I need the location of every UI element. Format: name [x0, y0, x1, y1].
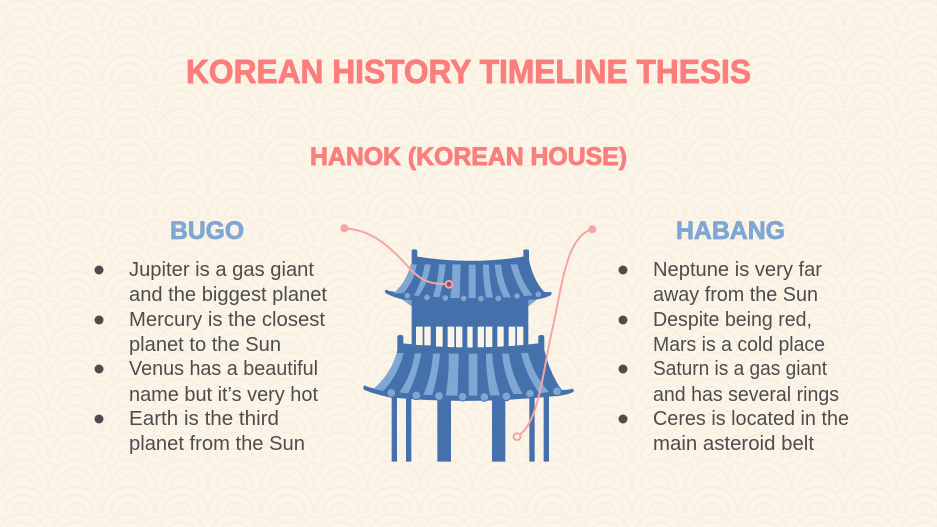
Bugo list: and the biggest planet: [129, 284, 327, 306]
Habang list: [618, 259, 849, 455]
Habang heading: HABANG: [676, 217, 785, 245]
title: KOREAN HISTORY TIMELINE THESIS: [186, 53, 751, 90]
Habang list: Neptune is very far: [653, 259, 822, 281]
lower rafters: [373, 353, 549, 396]
Habang list: main asteroid belt: [653, 433, 814, 455]
panel: Habang: [618, 217, 849, 455]
lower roof beads: [387, 387, 561, 401]
Bugo list: name but it’s very hot: [129, 384, 318, 406]
columns: [392, 395, 549, 462]
icon: hanok pagoda: [363, 249, 574, 462]
callout line: right: [514, 225, 596, 440]
Habang list: Saturn is a gas giant: [653, 358, 827, 380]
upper roof beads: [404, 291, 542, 302]
Bugo list: Venus has a beautiful: [129, 358, 318, 380]
Bugo list: planet to the Sun: [129, 334, 281, 356]
Bugo list: [94, 259, 327, 455]
Habang list: Mars is a cold place: [653, 334, 825, 356]
upper eave shadows: [395, 294, 544, 307]
Bugo list: Earth is the third: [129, 408, 279, 430]
callout line: left: [340, 224, 452, 288]
Habang list: Ceres is located in the: [653, 408, 849, 430]
lower roof: [363, 335, 574, 401]
upper storey: [412, 297, 528, 350]
panel: Bugo: [94, 217, 327, 455]
Habang list: and has several rings: [653, 384, 839, 406]
Habang list: away from the Sun: [653, 284, 818, 306]
upper roof: [385, 249, 552, 302]
Bugo list: Mercury is the closest: [129, 309, 325, 331]
Bugo heading: BUGO: [170, 217, 244, 245]
windows: [416, 327, 523, 348]
Bugo list: planet from the Sun: [129, 433, 305, 455]
upper rafters: [393, 264, 533, 298]
Bugo list: Jupiter is a gas giant: [129, 259, 314, 281]
Habang list: Despite being red,: [653, 309, 812, 331]
heading: Hanok: HANOK (KOREAN HOUSE): [310, 143, 627, 171]
